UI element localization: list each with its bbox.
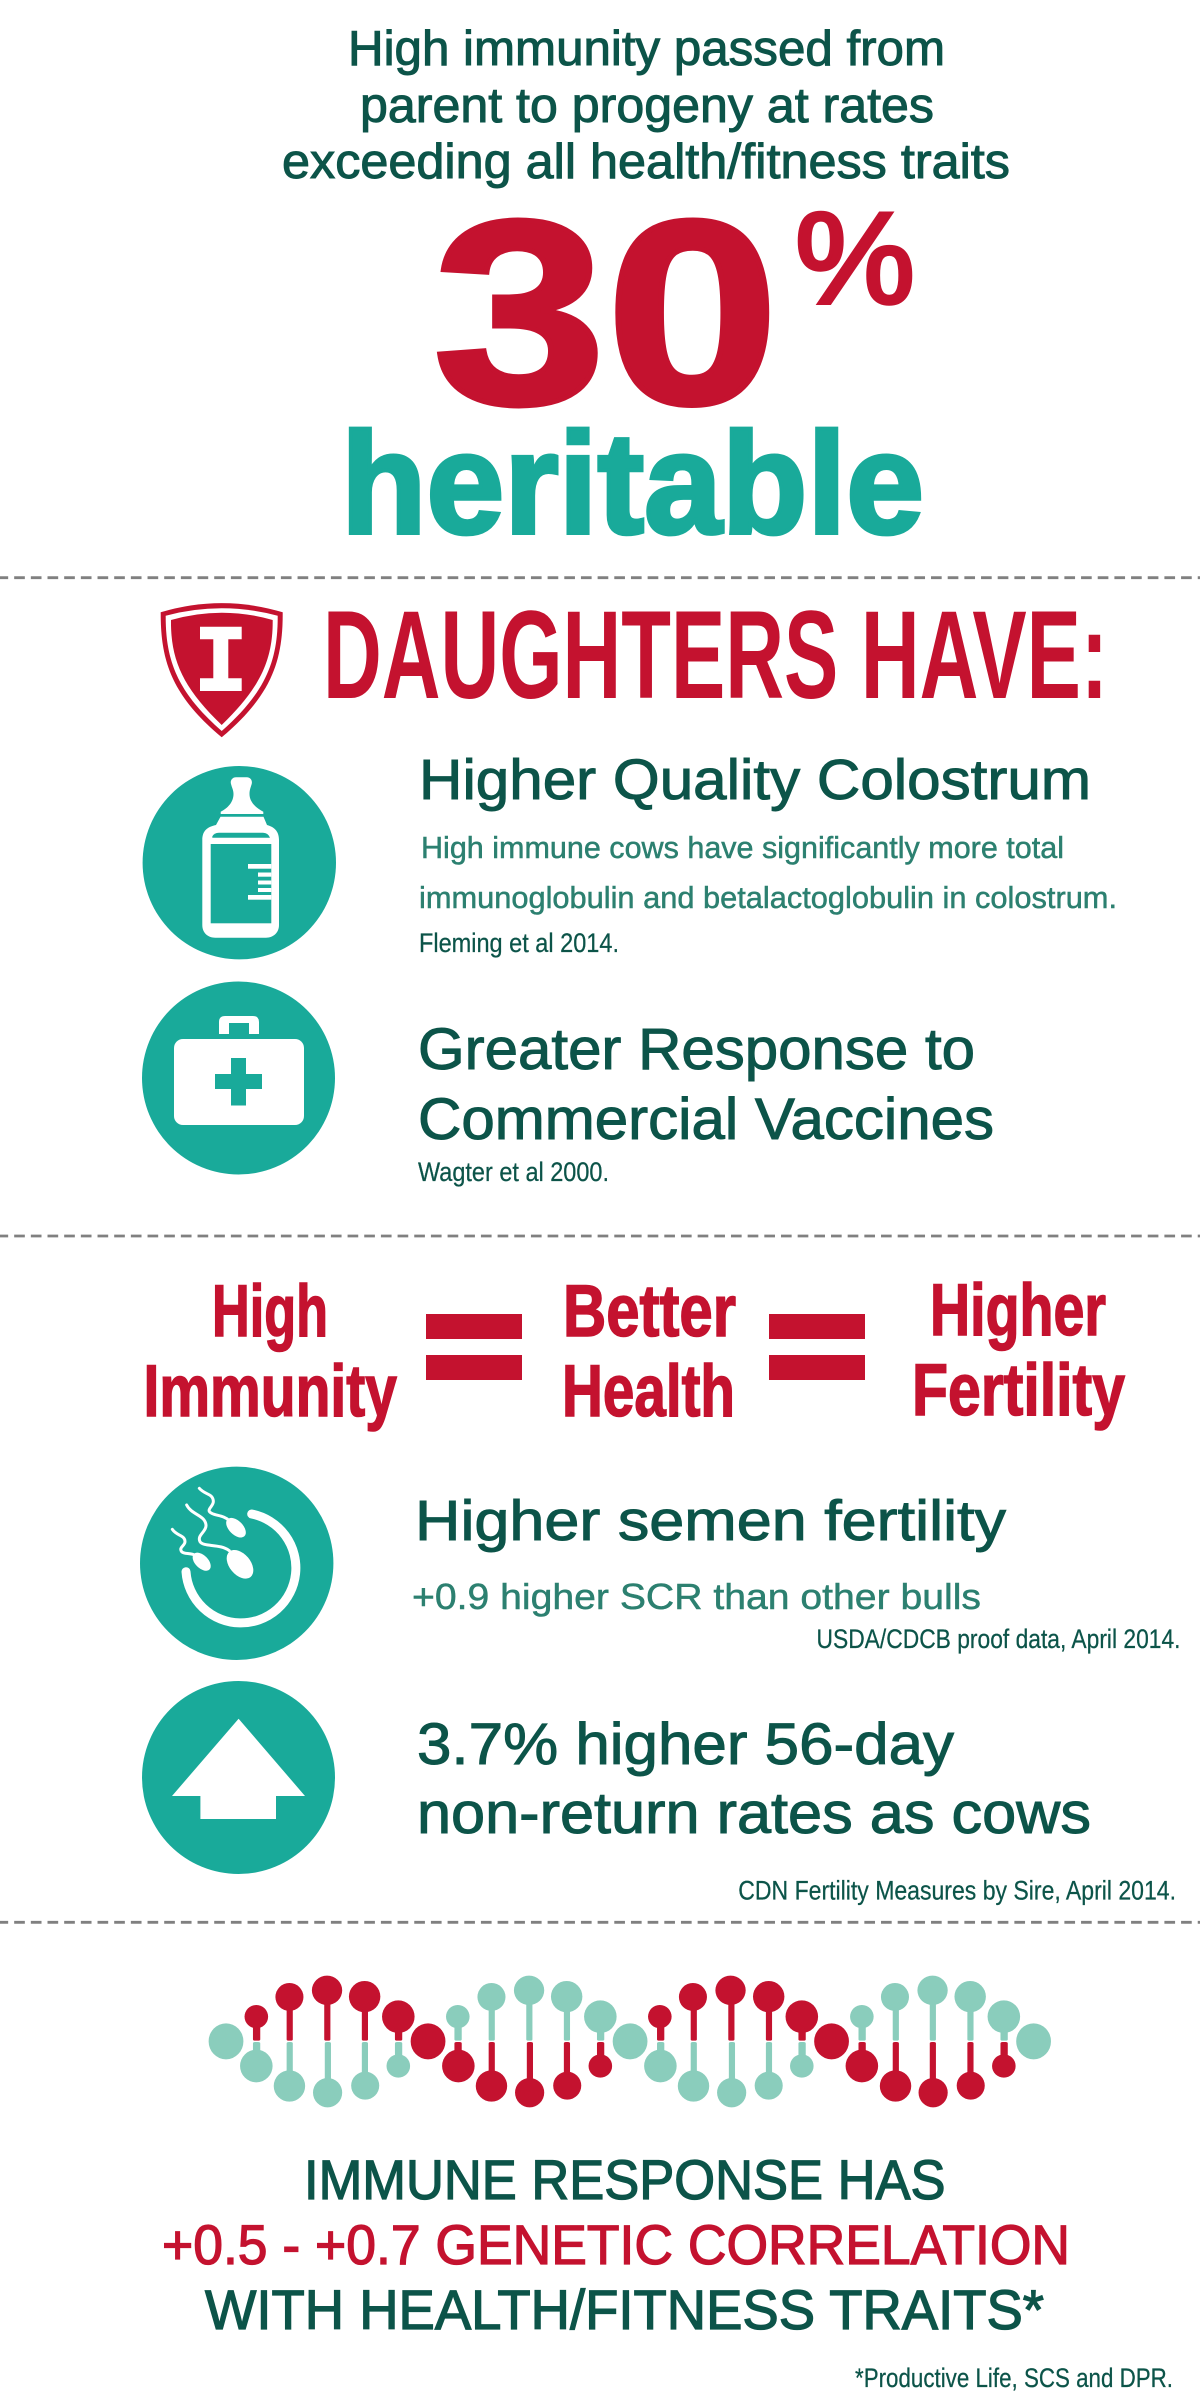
equals sign <box>769 1314 865 1380</box>
block: higher semen fertility: Higher semen fertility <box>415 1489 1007 1553</box>
statement: immune response correlation <box>162 2148 1070 2341</box>
intro text: exceeding all health/fitness traits <box>282 135 1010 189</box>
block: higher semen fertility: +0.9 higher SCR than other bulls <box>412 1576 981 1617</box>
icon: up arrow <box>142 1681 335 1874</box>
block: higher quality colostrum: High immune cows have significantly more total <box>421 830 1064 865</box>
label: high immunity: Immunity <box>144 1351 397 1432</box>
panel: daughters have <box>142 586 1117 1187</box>
icon: first aid kit <box>142 982 335 1174</box>
statement: immune response correlation: +0.5 - +0.7 GENETIC CORRELATION <box>162 2213 1070 2276</box>
label: higher fertility <box>912 1270 1125 1431</box>
intro text: High immunity passed from <box>348 22 945 76</box>
label: higher fertility: Higher <box>930 1270 1106 1351</box>
icon: shield with letter I <box>161 603 283 737</box>
block: non-return rates: 3.7% higher 56-day <box>417 1712 954 1777</box>
block: higher quality colostrum: Higher Quality Colostrum <box>419 748 1091 812</box>
icon: DNA double helix <box>209 1976 1051 2107</box>
statement: immune response correlation: WITH HEALTH/FITNESS TRAITS* <box>205 2278 1044 2341</box>
intro text <box>282 22 1010 189</box>
block: greater response to commercial vaccines: Wagter et al 2000. <box>418 1157 609 1187</box>
label: high immunity: High <box>212 1271 328 1352</box>
label: better health: Health <box>562 1351 735 1432</box>
label: better health: Better <box>563 1271 736 1352</box>
word: heritable: heritable <box>341 403 924 564</box>
label: higher fertility: Fertility <box>912 1350 1125 1431</box>
block: higher quality colostrum: immunoglobulin and betalactoglobulin in colostrum. <box>419 880 1117 915</box>
panel: immunity equals health equals fertility <box>140 1270 1180 1905</box>
statement: immune response correlation: IMMUNE RESPONSE HAS <box>304 2148 946 2211</box>
label: high immunity <box>144 1271 397 1432</box>
icon: baby bottle <box>143 766 336 959</box>
block: greater response to commercial vaccines: Commercial Vaccines <box>418 1087 994 1152</box>
block: higher quality colostrum: Fleming et al 2014. <box>419 928 619 958</box>
panel: 30% heritable headline <box>282 22 1010 564</box>
panel: genetic correlation <box>162 1976 1173 2393</box>
block: non-return rates <box>417 1712 1176 1905</box>
intro text: parent to progeny at rates <box>360 79 934 133</box>
block: non-return rates: non-return rates as cows <box>417 1781 1091 1846</box>
icon: sperm and egg <box>140 1467 333 1660</box>
equals sign <box>426 1314 522 1380</box>
block: higher semen fertility <box>412 1489 1180 1654</box>
percent sign: % <box>795 185 915 331</box>
label: better health <box>562 1271 736 1432</box>
big number 30: 30 <box>433 166 779 459</box>
block: greater response to commercial vaccines <box>418 1017 994 1187</box>
block: greater response to commercial vaccines: Greater Response to <box>418 1017 975 1082</box>
block: higher quality colostrum <box>419 748 1117 958</box>
